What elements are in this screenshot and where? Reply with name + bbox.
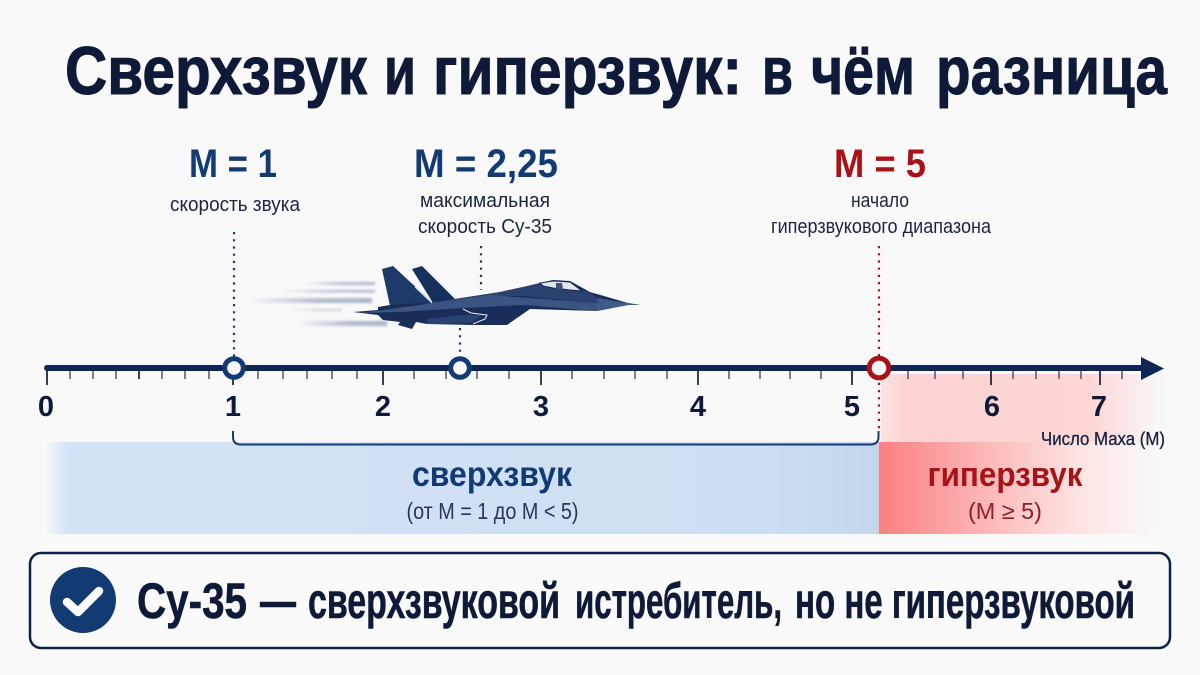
callout text xyxy=(137,573,1135,629)
hypersonic label: гиперзвук xyxy=(928,456,1083,494)
axis minor ticks xyxy=(70,370,1122,379)
title: в xyxy=(762,33,793,109)
callout text: истребитель, xyxy=(575,573,782,629)
marker label: M = 1: скорость звука xyxy=(170,194,301,216)
speed streaks xyxy=(247,282,387,326)
nose xyxy=(597,298,640,311)
white panel lines xyxy=(415,287,487,324)
marker: M = 1 ring xyxy=(225,359,243,377)
axis major ticks xyxy=(47,370,1100,385)
marker: M = 5 ring xyxy=(869,358,889,378)
hypersonic band xyxy=(879,442,1166,534)
axis numbers: 3 xyxy=(533,391,549,423)
supersonic bracket xyxy=(233,431,878,444)
marker label: M = 1: M = 1 xyxy=(189,142,277,186)
fuselage xyxy=(353,280,640,329)
hypersonic label xyxy=(928,456,1083,524)
callout box xyxy=(30,553,1170,648)
marker label: M = 2,25: максимальная xyxy=(420,190,550,212)
marker label: M = 2,25: скорость Су-35 xyxy=(418,216,552,238)
title xyxy=(65,33,1168,109)
axis numbers xyxy=(38,391,1107,423)
title: гиперзвук: xyxy=(433,33,742,109)
axis numbers: 1 xyxy=(225,391,241,423)
marker label: M = 5: начало xyxy=(851,190,909,212)
upper red zone xyxy=(881,374,1166,442)
title: и xyxy=(384,33,416,109)
canopy xyxy=(540,281,582,291)
mid fuselage band xyxy=(360,295,597,313)
pilot xyxy=(556,283,563,290)
axis numbers: 7 xyxy=(1091,391,1107,423)
callout text: сверхзвуковой xyxy=(308,573,560,629)
axis title: Число Маха (М) xyxy=(1041,428,1165,449)
fighter jet Su-35 xyxy=(353,266,640,329)
axis numbers: 0 xyxy=(38,391,54,423)
callout text: — xyxy=(260,573,296,629)
supersonic label xyxy=(406,455,578,524)
axis numbers: 4 xyxy=(690,391,706,423)
engine pod xyxy=(427,315,482,324)
marker label: M = 2,25: M = 2,25 xyxy=(414,142,558,186)
axis numbers: 2 xyxy=(375,391,391,423)
title: Сверхзвук xyxy=(65,33,368,109)
marker label: M = 1 xyxy=(170,142,301,216)
axis numbers: 6 xyxy=(984,391,1000,423)
marker label: M = 5: M = 5 xyxy=(834,142,926,186)
callout text: Су-35 xyxy=(137,573,247,629)
marker: M = 2,25 ring xyxy=(451,359,469,377)
dotted leader lines xyxy=(234,232,879,432)
supersonic band xyxy=(45,442,879,534)
front fin xyxy=(412,266,455,303)
axis line with arrow xyxy=(47,357,1164,380)
icon: check mark xyxy=(50,567,116,633)
title: чём xyxy=(811,33,915,109)
supersonic label: (от M = 1 до M < 5) xyxy=(406,498,578,524)
supersonic label: сверхзвук xyxy=(412,455,572,494)
marker label: M = 5 xyxy=(771,142,992,238)
marker label: M = 2,25 xyxy=(414,142,558,238)
axis numbers: 5 xyxy=(844,391,860,423)
rear fin xyxy=(382,266,433,306)
marker label: M = 5: гиперзвукового диапазона xyxy=(771,216,992,238)
hypersonic label: (M ≥ 5) xyxy=(968,498,1042,524)
upper fuselage shading xyxy=(420,284,597,305)
